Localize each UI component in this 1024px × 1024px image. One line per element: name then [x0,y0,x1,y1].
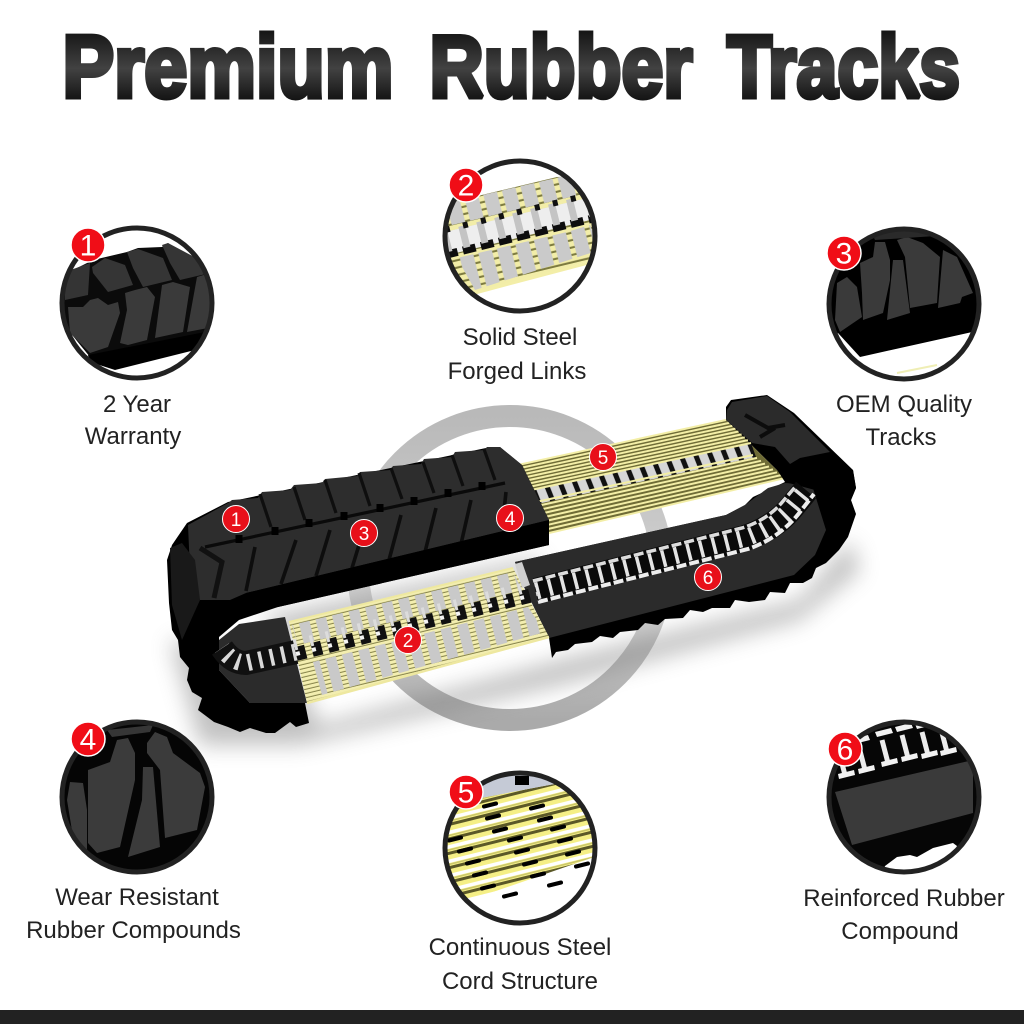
track number markers [222,444,722,654]
inset image 5 [448,776,592,898]
panel: reinforced rubber compound [803,717,1005,945]
marker 1 [222,506,250,532]
marker 5: 5 [598,448,608,469]
title [62,17,960,116]
caption line 2: Tracks [865,424,937,451]
number badge 3 [827,236,861,270]
inset image 1 [64,243,210,370]
circle frame [829,722,979,872]
right link row [533,486,814,602]
title: Premium [62,17,394,116]
marker 4 [496,504,524,532]
tread lug surface [170,447,549,640]
panel: wear resistant rubber compounds [26,720,241,944]
caption line 2: Forged Links [448,358,586,385]
circle frame [445,161,595,311]
upper lug separators [260,449,495,527]
marker 5 [590,444,616,470]
number badge 3: 3 [836,238,852,270]
caption line 2: Warranty [85,423,181,450]
title: Rubber [430,17,692,116]
number badge 4 [71,722,105,756]
inset image 3 [832,232,976,374]
number badge 6: 6 [837,734,853,766]
number badge 5 [449,775,483,810]
circle frame [829,229,979,379]
right-end lugs [726,396,856,500]
caption: Wear Resistant [55,884,219,911]
caption: OEM Quality [836,391,972,418]
caption: Solid Steel [463,324,577,351]
marker 3 [350,520,378,546]
marker 6 [694,564,722,590]
panel: solid steel forged links [440,159,600,385]
caption line 2: Cord Structure [442,968,598,995]
right lower rubber side [515,395,856,658]
number badge 4: 4 [80,724,96,756]
inset image 6 [832,724,976,867]
number badge 5: 5 [458,776,474,810]
circle frame [445,773,595,923]
center groove notches [239,482,482,543]
caption line 2: Compound [841,918,959,945]
panel: oem quality tracks [826,226,982,445]
caption line 2: Rubber Compounds [26,917,241,944]
track soft shadows [170,540,860,745]
lower lug separators [246,492,506,591]
right inner rubber surface [515,483,826,638]
marker 3: 3 [359,524,369,545]
marker 6: 6 [703,568,713,589]
caption: Continuous Steel [429,934,611,961]
number badge 1: 1 [80,230,96,262]
panel: continuous steel cord structure [429,770,611,995]
marker 4: 4 [505,509,516,530]
marker 2 [394,626,422,654]
background ring [358,416,662,720]
main rubber track illustration [167,395,856,733]
number badge 1 [71,228,105,262]
exposed steel cords section [518,420,785,533]
circle frame [62,722,212,872]
circle frame [62,228,212,378]
left link row [222,648,296,663]
inset image 2 [448,176,592,294]
upper and left rubber black body [167,447,549,733]
panel: 2 year warranty [60,226,215,450]
number badge 2: 2 [458,170,474,202]
number badge 2 [449,168,483,202]
inset image 4 [64,724,210,870]
caption: Reinforced Rubber [803,885,1005,912]
number badge 6 [828,732,862,766]
title: Tracks [727,17,960,116]
marker 2: 2 [403,631,413,652]
caption: 2 Year [103,391,171,418]
exposed steel links row [531,443,756,504]
left inner rubber surface [219,617,307,703]
bottom bar [0,1010,1024,1024]
exposed forged links section [289,562,549,703]
marker 1: 1 [231,510,241,531]
